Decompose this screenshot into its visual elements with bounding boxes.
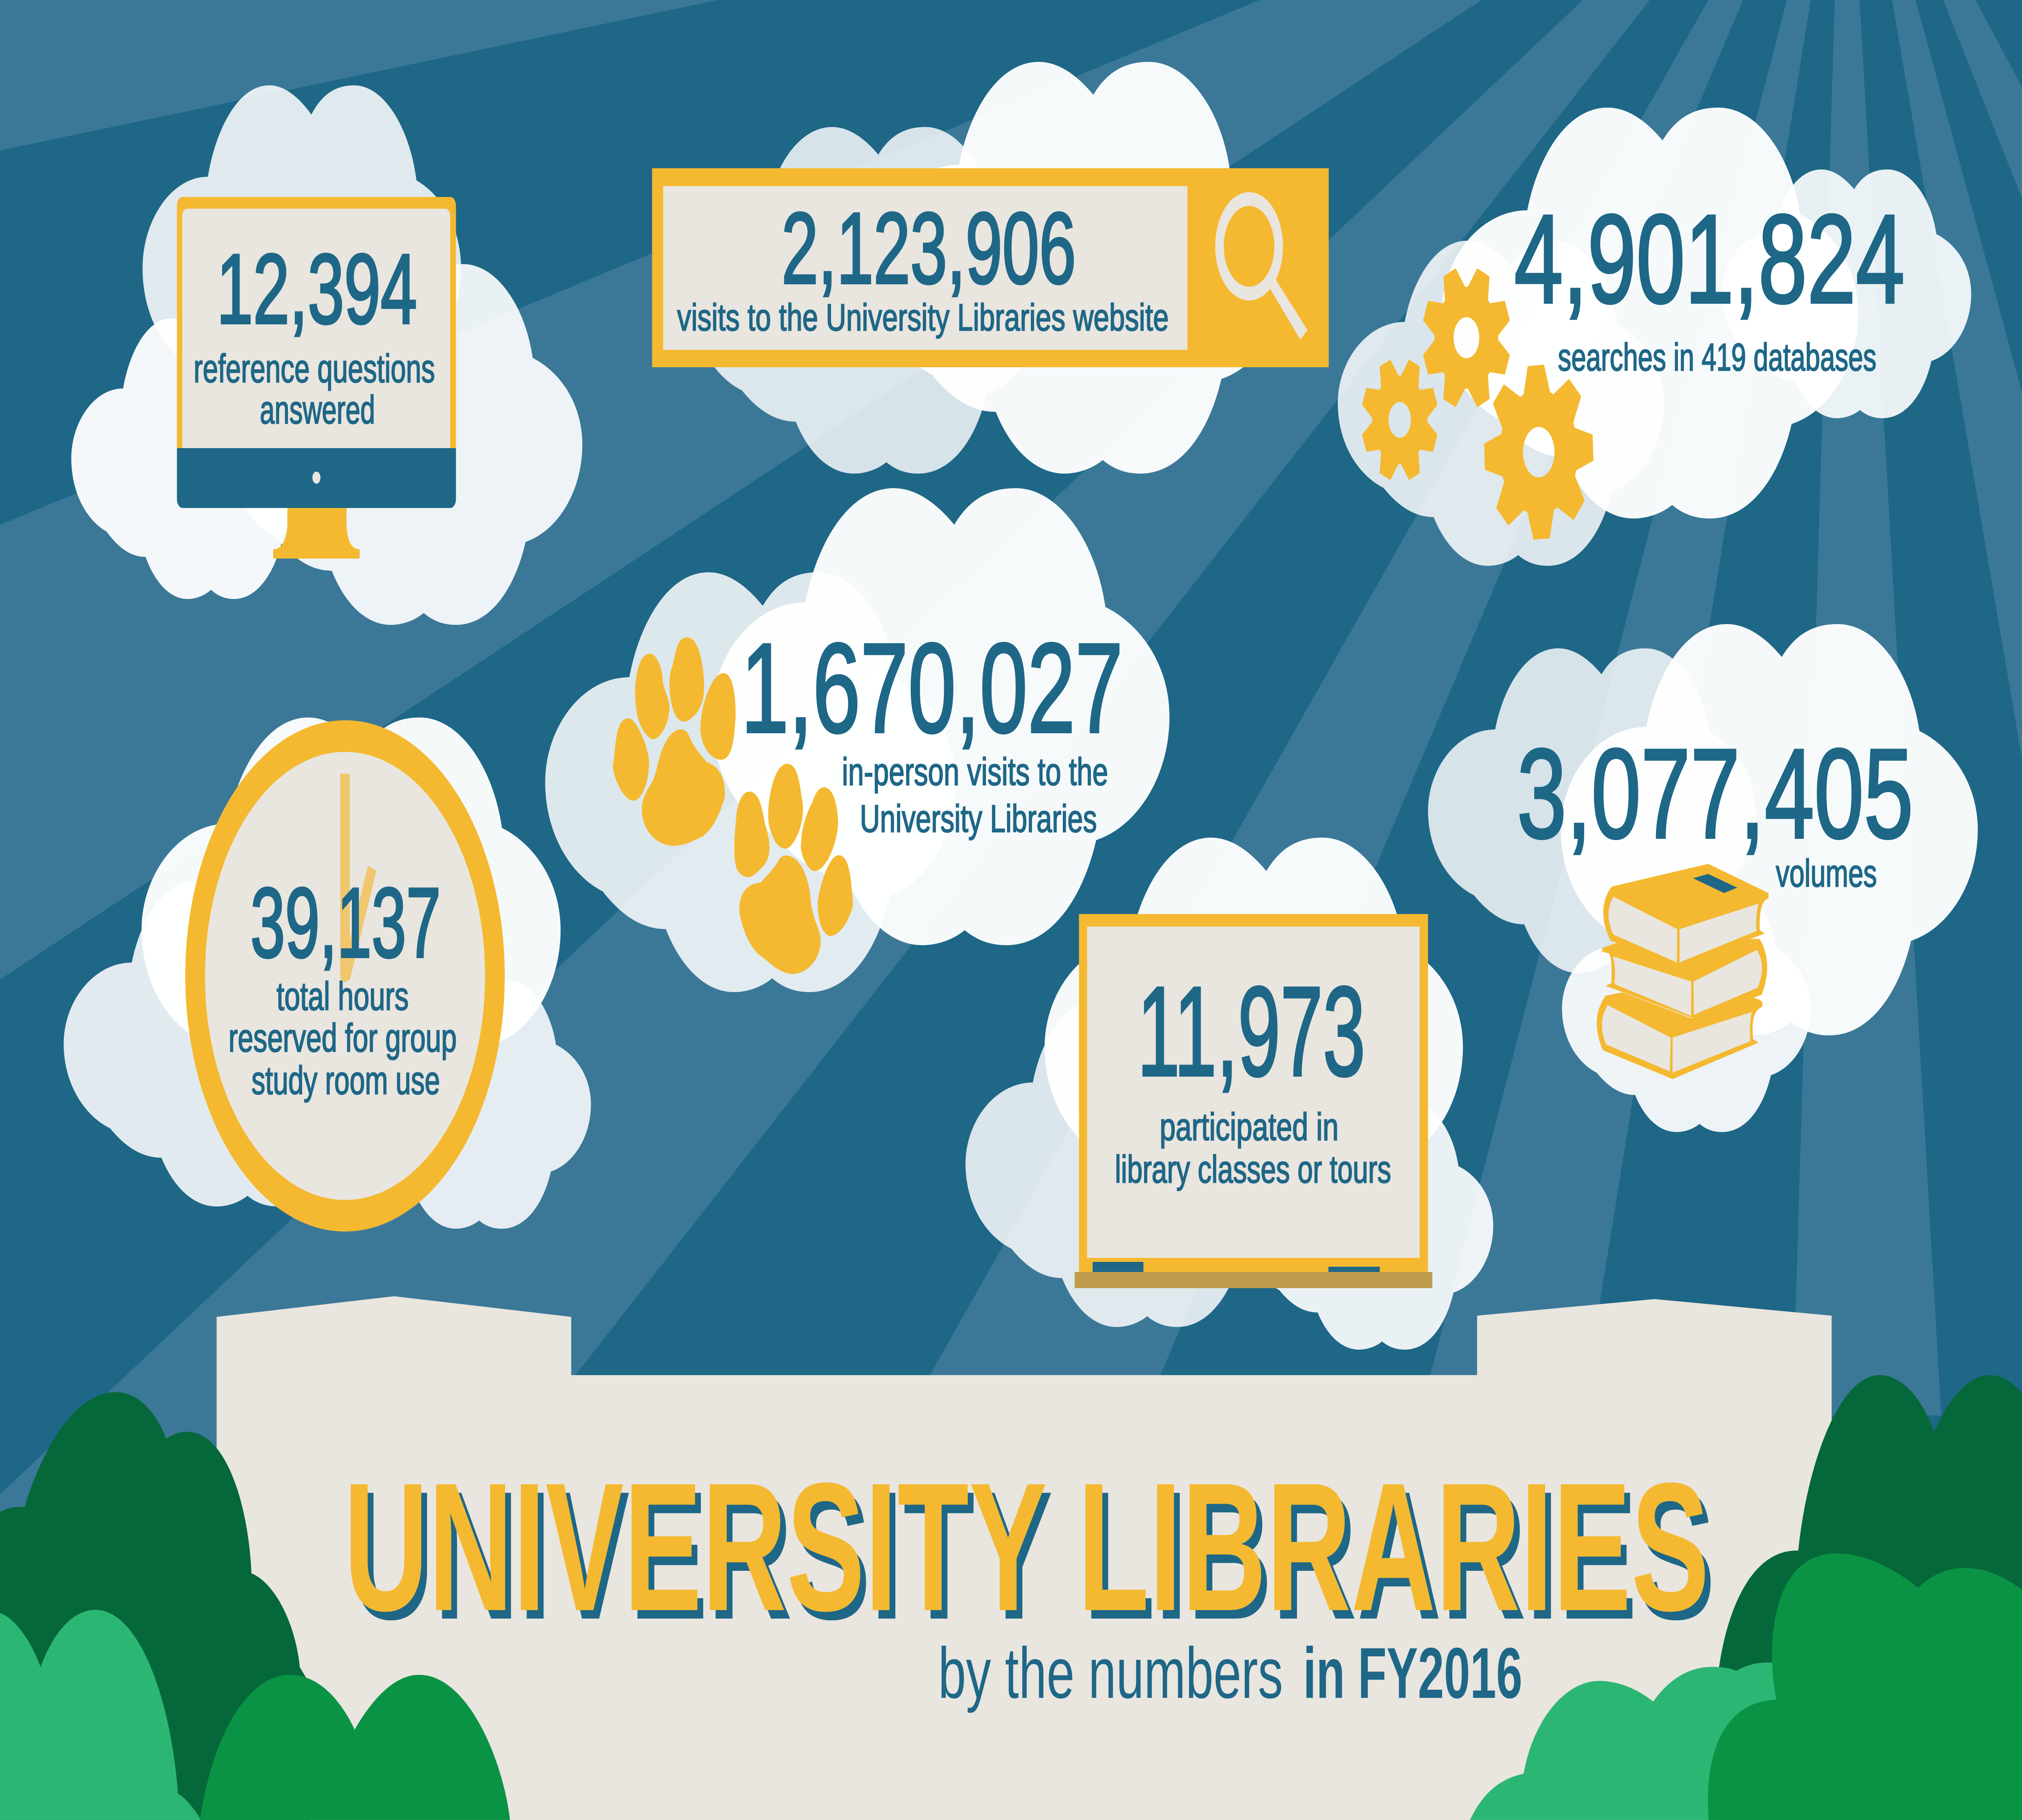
label: reference questions answered: answered — [260, 388, 375, 432]
icon: desktop monitor — [177, 197, 456, 559]
label: total hours reserved for group study room use — [228, 974, 457, 1103]
stat: 1,670,027: 1,670,027 — [741, 617, 1123, 759]
icon: chalkboard — [1075, 914, 1432, 1288]
label: in-person visits to the University Libraries: University Libraries — [860, 797, 1097, 840]
icon: tiger paw prints — [613, 637, 853, 974]
label: searches in 419 databases: searches in 419 databases — [1558, 336, 1876, 379]
icon: magnifying glass — [1220, 199, 1307, 340]
stat: 2,123,906: 2,123,906 — [781, 192, 1076, 305]
label: total hours reserved for group study room use: reserved for group — [228, 1016, 457, 1060]
clouds behind clock — [64, 717, 591, 1229]
title: UNIVERSITY LIBRARIES: UNIVERSITY LIBRARIES — [349, 1453, 1715, 1657]
stat: 12,394: 12,394 — [217, 234, 417, 345]
panel: database searches — [1338, 108, 1971, 566]
label: reference questions answered — [194, 347, 435, 432]
clouds behind books — [1428, 624, 1978, 1132]
label: participated in library classes or tours: participated in — [1160, 1105, 1339, 1148]
building silhouette — [217, 1296, 1832, 1820]
label: total hours reserved for group study room use: total hours — [277, 974, 409, 1019]
label: reference questions answered: reference questions — [194, 347, 435, 391]
label: in-person visits to the University Libraries — [842, 750, 1108, 840]
clouds behind paws — [545, 488, 1170, 992]
clouds behind chalkboard — [966, 838, 1493, 1350]
label: in-person visits to the University Libraries: in-person visits to the — [842, 750, 1108, 793]
title: UNIVERSITY LIBRARIES: UNIVERSITY LIBRARIES — [344, 1445, 1709, 1649]
stat: 3,077,405: 3,077,405 — [1517, 722, 1913, 865]
stat: 4,901,824: 4,901,824 — [1514, 188, 1905, 330]
subtitle: by the numbers in FY2016: in FY2016 — [1303, 1633, 1522, 1713]
subtitle: by the numbers in FY2016: by the numbers — [938, 1633, 1283, 1713]
panel: reference questions — [71, 85, 582, 625]
icon: clock — [195, 736, 495, 1216]
label: volumes: volumes — [1776, 852, 1877, 895]
label: participated in library classes or tours: library classes or tours — [1115, 1148, 1391, 1191]
panel: in-person visits — [545, 488, 1170, 992]
icon: three gears — [1349, 245, 1596, 544]
icon: stack of books — [1597, 864, 1768, 1079]
subtitle: by the numbers in FY2016 — [938, 1633, 1522, 1713]
panel: website visits — [652, 62, 1329, 474]
panel: volumes — [1428, 624, 1978, 1132]
stat: 39,137: 39,137 — [250, 868, 441, 978]
trees: left — [0, 1392, 510, 1820]
panel: classes and tours — [966, 838, 1493, 1350]
label: participated in library classes or tours — [1115, 1105, 1391, 1191]
panel: group study hours — [64, 717, 591, 1229]
clouds behind search bar — [693, 62, 1288, 474]
clouds behind gears — [1338, 108, 1971, 566]
label: total hours reserved for group study room use: study room use — [252, 1058, 440, 1103]
trees: right — [1470, 1375, 2022, 1820]
clouds behind monitor — [71, 85, 582, 625]
label: visits to the University Libraries website: visits to the University Libraries website — [677, 296, 1169, 339]
stat: 11,973: 11,973 — [1137, 960, 1365, 1103]
search bar — [652, 168, 1329, 367]
